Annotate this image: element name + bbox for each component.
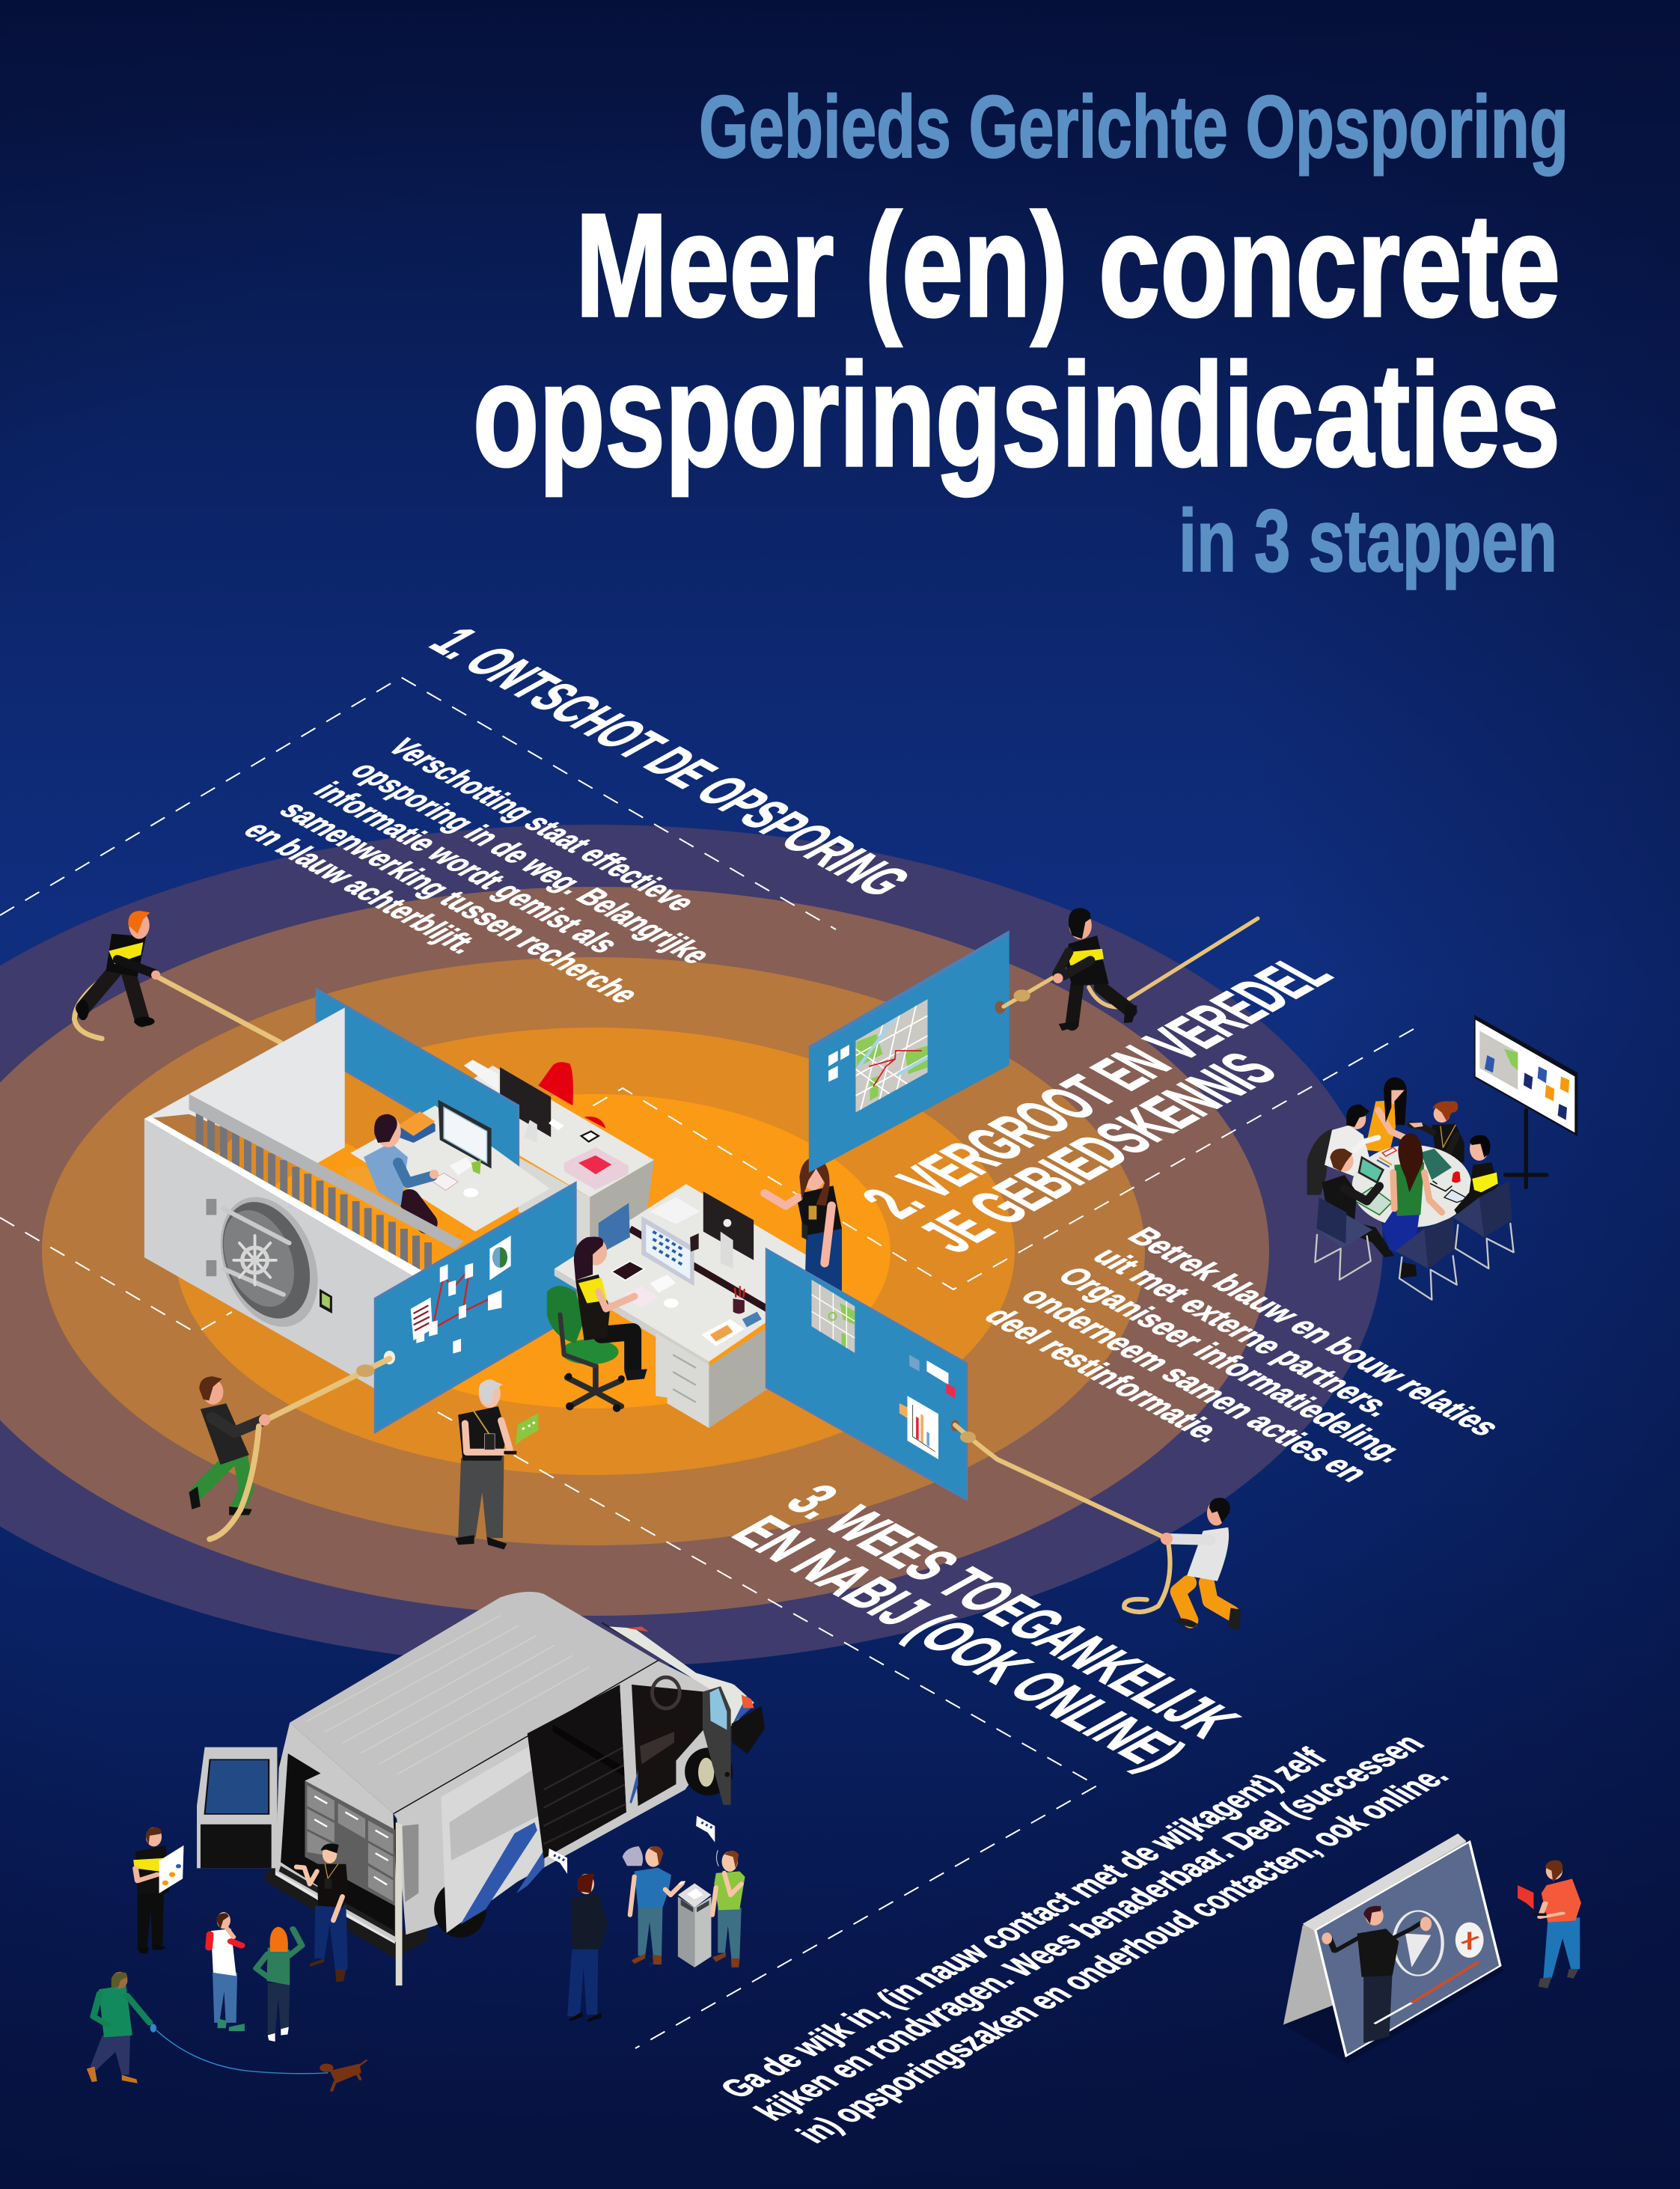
cop with board [133, 1828, 184, 1954]
section 1 heading: 1. ONTSCHOT DE OPSPORING [416, 620, 925, 904]
presentation screen on stand [1474, 1015, 1577, 1188]
speech bubble [549, 1848, 567, 1874]
blue partition with network diagram [375, 1183, 575, 1432]
seated woman desk, front [555, 1184, 837, 1428]
line: 3. WEES TOEGANKELIJK [771, 1476, 1254, 1746]
line: onderneem samen acties en [1012, 1282, 1378, 1486]
line: Verschotting staat effectieve [379, 733, 706, 916]
pinned items [909, 1355, 920, 1372]
table items [1353, 1147, 1468, 1215]
man in white shirt [1161, 1498, 1241, 1631]
concentric target rings [0, 825, 1383, 1667]
van roof [290, 1592, 754, 1814]
section 1 body text [235, 733, 721, 1008]
rear wheel [434, 1881, 486, 1938]
back and top of stand [1283, 1834, 1466, 2024]
woman in green standing [1382, 1133, 1442, 1278]
presenter on screen [1322, 1906, 1432, 2043]
steering wheel [652, 1677, 679, 1709]
open van interior [528, 1681, 705, 1859]
back desk with tray and monitor [436, 1060, 654, 1251]
ground shadow [1280, 1941, 1505, 2064]
people at left of van [87, 1747, 367, 2090]
line: deel restinformatie. [976, 1302, 1235, 1447]
line: EN NABIJ (OOK ONLINE) [717, 1507, 1201, 1778]
right upper wall with map and cop [809, 908, 1258, 1173]
speech bubble [696, 1816, 715, 1843]
blue partition wall, back [317, 989, 519, 1171]
sliding door [441, 1742, 545, 1933]
line: samenwerking tussen recherche [271, 796, 650, 1008]
note [926, 1361, 948, 1384]
desk items [599, 1191, 762, 1346]
line: en blauw achterblijft. [235, 816, 489, 958]
front door open [703, 1686, 731, 1805]
bottom right wall with map, chart and rope [766, 1249, 967, 1500]
screen [1316, 1842, 1500, 2056]
front desk of seated man [350, 1100, 550, 1232]
blue partition [766, 1249, 967, 1500]
bar chart sheet [907, 1396, 938, 1459]
rope knob [995, 1001, 1006, 1013]
woman with orange hair [256, 1927, 302, 2042]
man with dog leash [87, 1972, 156, 2083]
vault body [144, 1116, 444, 1392]
man in blue shirt smoking [630, 1846, 685, 1964]
dachshund [320, 2060, 367, 2090]
viewer with phone [1533, 1860, 1581, 1988]
close button [1456, 1923, 1484, 1958]
open rear door [197, 1747, 277, 1868]
van with officers [264, 1592, 765, 2022]
rope [955, 1425, 1170, 1612]
van rear bumper and interior [264, 1757, 427, 1959]
seated woman with green chair [547, 1237, 647, 1412]
man pulling rope, bottom left [189, 1376, 270, 1539]
line: JE GEBIEDSKENNIS [902, 1043, 1293, 1262]
report sheet [411, 1298, 433, 1340]
smoke cloud [623, 1846, 643, 1866]
woman with red hair, detective [1409, 1101, 1464, 1167]
line: kijken en rondvragen. Wees benaderbaar. Deel (successen [747, 1729, 1433, 2126]
bevel [1303, 1834, 1466, 1932]
man in white [1325, 1105, 1378, 1177]
chair front center [1396, 1217, 1457, 1300]
red chat bubble [1518, 1885, 1533, 1909]
rope on vault, bottom left puller [268, 1351, 395, 1419]
rope knob [951, 1420, 959, 1431]
progress bar [1375, 1961, 1479, 2024]
van body side [393, 1661, 754, 1935]
standing woman [765, 1157, 842, 1295]
cop pulling rope, left [74, 911, 281, 1042]
map [855, 999, 928, 1113]
meeting table group [1307, 1015, 1577, 1300]
play button [1393, 1911, 1443, 1976]
front of van [627, 1626, 765, 1754]
man with tablet [1322, 1149, 1394, 1257]
chair front left [1315, 1197, 1372, 1280]
section 2 heading [846, 947, 1348, 1262]
office illustration: vault, desks, walls [74, 911, 842, 1549]
rear chairs and jacket [1307, 1129, 1332, 1195]
line: informatie wordt gemist als [305, 777, 629, 958]
chair right [1453, 1181, 1514, 1268]
vault door [203, 1182, 336, 1341]
man in police shirt [1454, 1135, 1498, 1222]
line: Ga de wijk in, (in nauw contact met de wijkagent) zelf [712, 1743, 1336, 2104]
dashed section outlines [0, 677, 1414, 2048]
blue partition with map [809, 930, 1009, 1173]
cargo hold [279, 1753, 395, 1937]
grey-haired man with phone [455, 1379, 538, 1549]
detective at van rear [296, 1843, 349, 1982]
network diagram lines [433, 1268, 492, 1329]
online video panel and viewer [1280, 1834, 1581, 2064]
bottom right puller and rope [955, 1425, 1241, 1631]
vault rail and bars [189, 1094, 464, 1286]
small map [811, 1280, 855, 1353]
section 3 heading [717, 1476, 1254, 1778]
orange tab [899, 1403, 907, 1418]
pie chart card [489, 1236, 511, 1280]
line: opsporing in de weg. Belangrijke [342, 757, 721, 968]
ashtray bin [678, 1883, 711, 1967]
red tag [946, 1383, 955, 1398]
subtitle bottom: in 3 stappen [1179, 492, 1557, 590]
line: uit met externe partners. [1084, 1242, 1405, 1421]
van rear panel [275, 1723, 399, 1944]
man in dark jacket [567, 1874, 608, 2022]
vault interior floor and back wall [144, 1007, 504, 1286]
woman in yellow [1365, 1077, 1407, 1152]
person cards [828, 1045, 849, 1082]
man in white and red [209, 1912, 245, 2031]
round table [1352, 1145, 1472, 1227]
line: Betrek blauw en bouw relaties [1120, 1222, 1510, 1441]
line: Organiseer informatiedeling. [1049, 1262, 1417, 1467]
title block [473, 78, 1568, 590]
open rear door edge [396, 1822, 403, 1985]
section 3 body text [712, 1729, 1457, 2148]
side panel [403, 1824, 418, 1902]
line: in) opsporingszaken en onderhoud contacten, ook online. [789, 1762, 1457, 2149]
man in green shirt smoking [712, 1851, 745, 1967]
section 2 body text [976, 1222, 1510, 1486]
front wheel [685, 1747, 733, 1795]
dog leash [156, 2030, 328, 2074]
seated man in blue [343, 1114, 439, 1223]
cop pulling rope, right [1004, 908, 1258, 1031]
